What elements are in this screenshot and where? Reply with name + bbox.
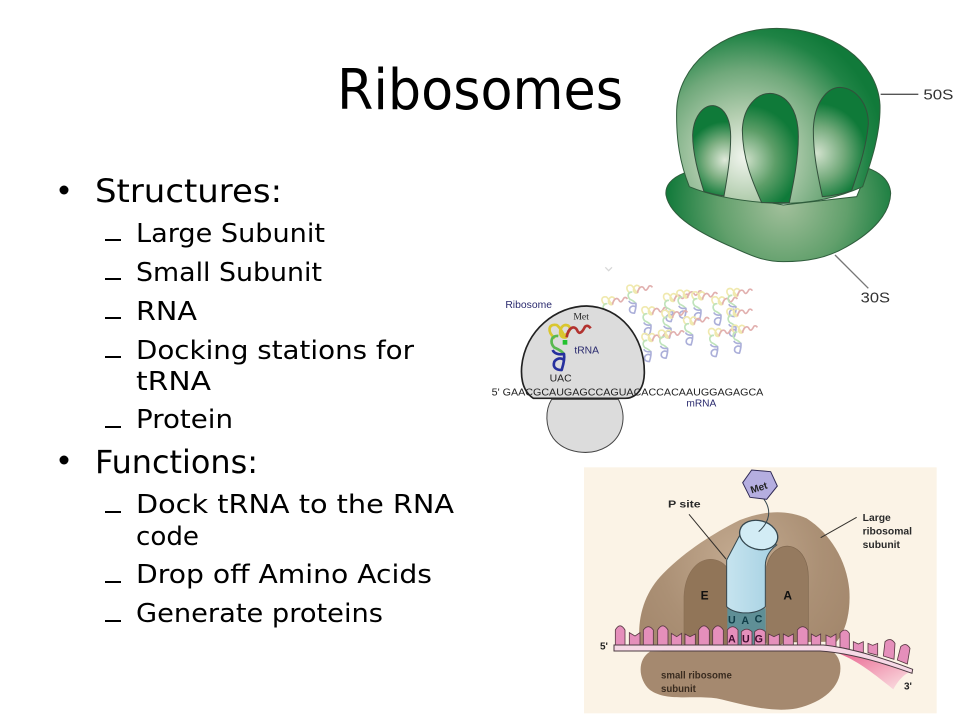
small ribosome subunit label: small ribosome [661,670,732,681]
codon letters: G [755,634,763,646]
diagram: green 50S/30S ribosome [666,28,953,306]
sub-list: structures: Protein [136,405,233,435]
anticodon letters [728,613,763,627]
sub-list: functions [105,490,454,629]
Met tether [759,499,769,532]
sub-list: structures: tRNA [136,367,211,397]
mRNA teeth [615,626,910,664]
50S leader line [881,92,918,96]
title: Ribosomes [337,58,623,123]
large subunit [521,306,644,398]
Met label: Met [573,312,589,323]
P site label: P site [668,500,701,511]
sub-list: functions: Dock tRNA to the RNA [136,490,454,520]
Met label: Met [749,480,770,496]
small ribosome subunit label: subunit [661,684,697,695]
mRNA sequence: 5' GAACGCAUGAGCCAGUACACCACAAUGGAGAGCA [492,388,764,399]
Met hexagon [743,470,777,499]
tRNA label: tRNA [574,346,599,357]
mRNA strand tail [837,653,912,689]
tunnel left [693,106,731,196]
beige background [584,467,937,713]
anticodon letters: U [728,614,736,626]
3 prime label: 3' [904,682,912,693]
anticodon letters: C [755,613,763,625]
tRNA body [727,532,777,613]
anticodon letters: A [741,615,749,627]
sub-list: structures: Docking stations for [136,336,414,366]
E label: E [701,588,709,602]
tRNA top [736,516,781,554]
heading: Functions: Functions: [95,443,258,481]
top arrow mark [605,267,612,271]
P site leader [689,514,726,559]
A site [767,546,808,650]
A label: A [783,588,792,602]
sub-list: functions: Generate proteins [136,599,383,629]
sub-list: structures: RNA [136,297,197,327]
large ribosomal subunit label: Large [863,513,891,524]
30S label: 30S [861,289,890,306]
bullet list: structures and functions [60,172,454,629]
large subunit leader [821,517,857,538]
sub-list: functions: Drop off Amino Acids [136,560,432,590]
mRNA strand [614,645,913,673]
sub-list: structures [105,219,414,435]
large ribosomal subunit label: ribosomal [863,527,912,538]
50S label: 50S [923,86,953,103]
codon letters [728,634,763,646]
faded tRNA cloud [602,267,757,362]
sub-list: structures: Small Subunit [136,258,322,288]
small subunit [547,399,623,452]
tunnel middle [742,93,798,203]
E site [684,559,728,650]
sub-list: functions: code [136,522,199,552]
diagram: ribosome on mRNA with tRNA [492,267,764,452]
mRNA label: mRNA [686,399,717,410]
codon letters: A [728,634,736,646]
ribosome label: Ribosome [505,300,552,311]
30S leader line [835,255,868,288]
codon letters: U [742,634,750,646]
diagram: tRNA docking P site [584,467,937,713]
large ribosomal subunit body [639,512,850,645]
small ribosome subunit body [641,650,840,710]
sub-list: structures: Large Subunit [136,219,325,249]
large ribosomal subunit label: subunit [863,540,901,551]
30S small subunit [666,168,891,262]
tunnel right [813,87,868,197]
5 prime label: 5' [600,642,608,653]
anticodon label: UAC [550,373,572,384]
50S large subunit [677,28,880,203]
heading: Structures: Structures: [95,172,282,210]
tRNA molecule [550,325,591,370]
codon backing [727,608,766,645]
